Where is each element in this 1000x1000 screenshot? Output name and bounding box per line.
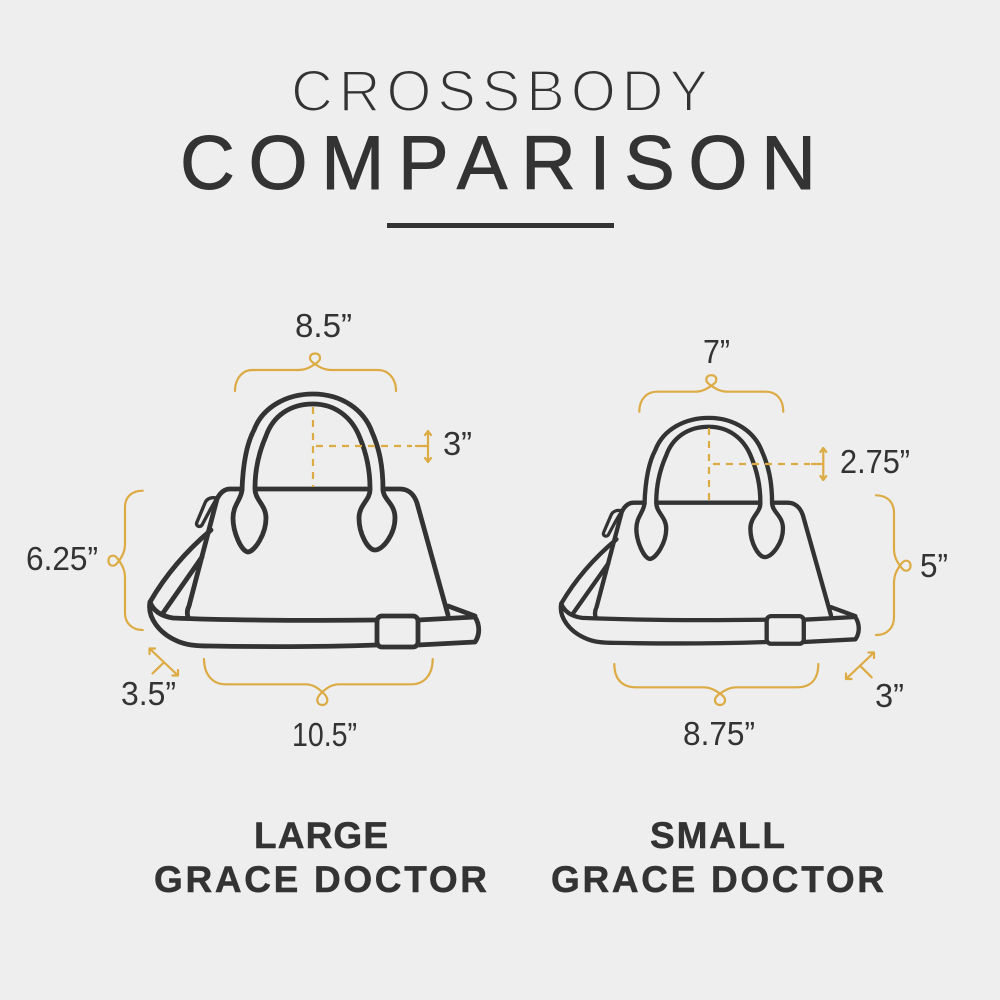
measurement: handle drop: 2.75”	[840, 443, 910, 480]
back strap	[561, 539, 855, 616]
measurement: height: 6.25”	[26, 540, 98, 577]
panel: large grace doctor	[26, 307, 487, 900]
strap buckle	[767, 616, 804, 644]
back strap	[150, 530, 475, 616]
measurement: top width: 7”	[703, 333, 730, 370]
handle tabs	[636, 503, 783, 559]
bag handle	[644, 418, 772, 504]
title underline	[387, 223, 614, 228]
bag handle	[242, 394, 383, 490]
top width brace	[639, 375, 783, 412]
name line 1: SMALL	[650, 815, 785, 856]
measurement: height: 5”	[920, 547, 948, 584]
depth arrow	[846, 652, 874, 679]
measurement: depth: 3.5”	[121, 675, 176, 712]
title	[180, 59, 816, 206]
name: small grace doctor	[551, 815, 884, 900]
measurement: top width: 8.5”	[295, 307, 352, 344]
name line 2: GRACE DOCTOR	[551, 859, 884, 900]
name: large grace doctor	[154, 815, 487, 900]
title line: comparison: COMPARISON	[180, 121, 816, 206]
handle tabs	[233, 489, 395, 552]
handle drop guides	[313, 407, 412, 487]
illustration: large bag	[150, 394, 479, 647]
name line 1: LARGE	[254, 815, 388, 856]
illustration: small bag	[561, 418, 859, 644]
zipper pull	[197, 498, 217, 526]
measurement: depth: 3”	[875, 677, 904, 714]
depth arrow	[150, 648, 178, 676]
handle drop arrow	[416, 431, 431, 462]
dimension marks: large bag	[108, 354, 433, 705]
top width brace	[235, 354, 396, 391]
height brace	[876, 495, 910, 635]
name line 2: GRACE DOCTOR	[154, 859, 487, 900]
strap buckle	[377, 616, 418, 647]
panel: small grace doctor	[551, 333, 948, 900]
front strap	[150, 602, 479, 647]
dimension marks: small bag	[614, 375, 910, 705]
handle drop arrow	[812, 448, 826, 480]
title line: crossbody: CROSSBODY	[291, 59, 708, 124]
front strap	[561, 604, 859, 643]
bottom width brace	[204, 659, 433, 705]
bottom width brace	[614, 664, 818, 705]
handle drop guides	[709, 428, 810, 502]
measurement: bottom width: 8.75”	[683, 715, 755, 752]
bag body	[187, 489, 448, 617]
bag body	[595, 503, 831, 617]
measurement: handle drop: 3”	[443, 425, 472, 462]
zipper pull	[603, 510, 622, 536]
height brace	[108, 491, 143, 630]
measurement: bottom width: 10.5”	[292, 716, 357, 753]
